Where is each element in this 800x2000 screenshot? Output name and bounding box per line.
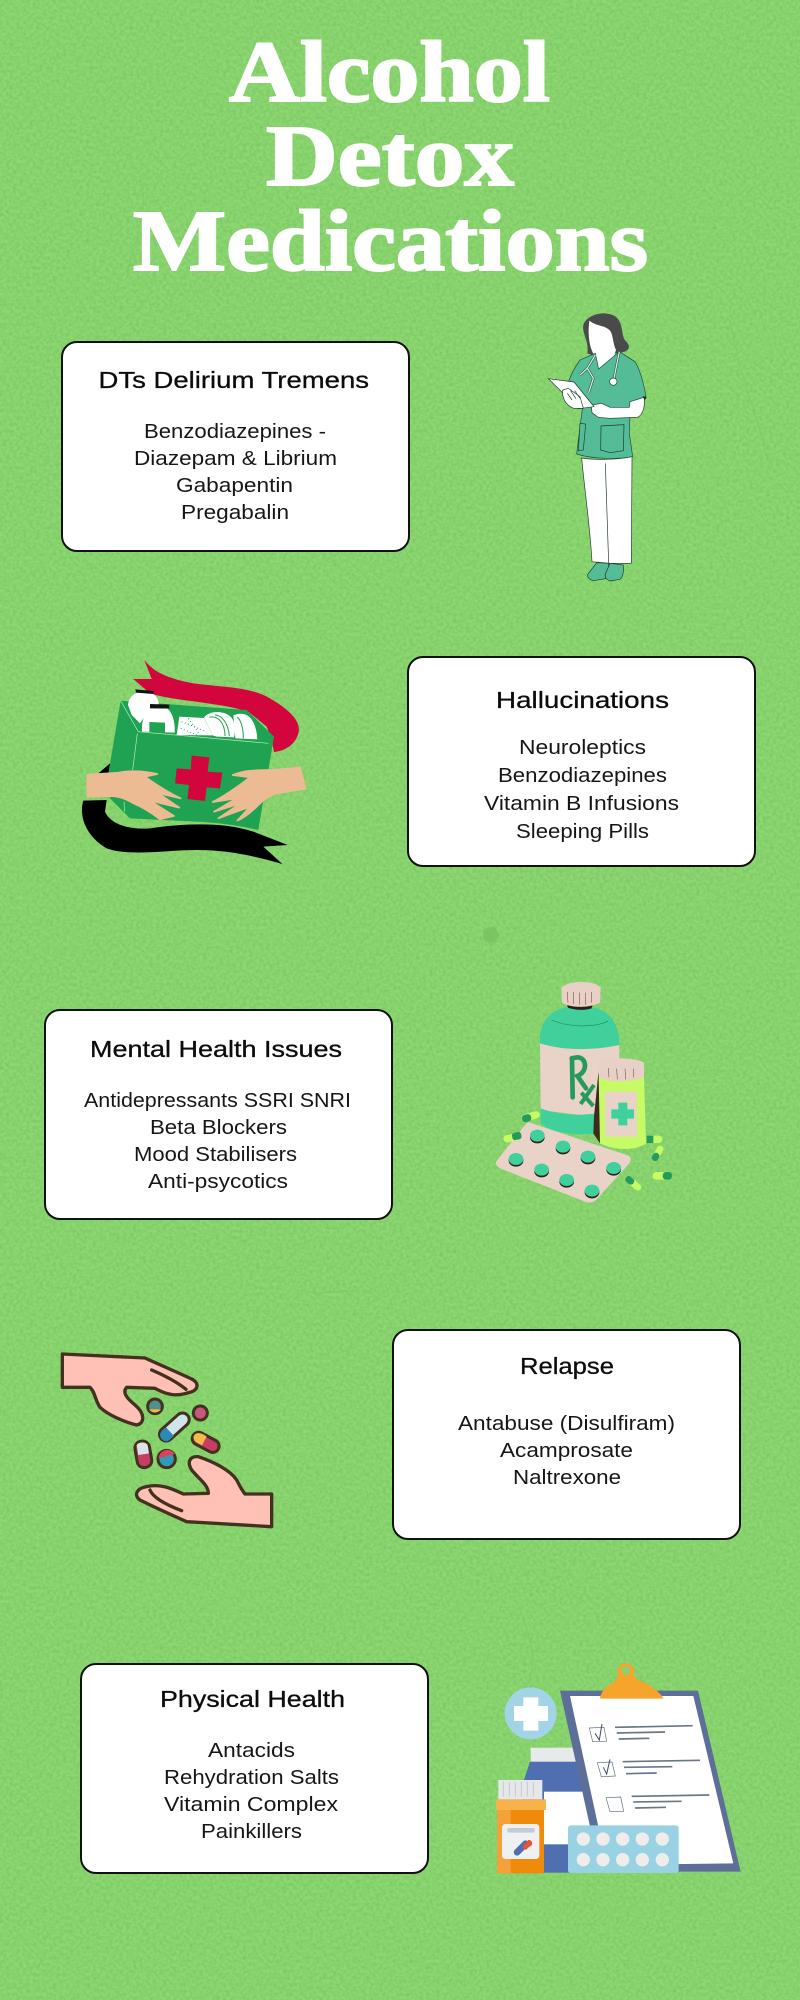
- text block: hallucination medications: Sleeping Pills: [516, 821, 649, 843]
- text block: relapse medications: [458, 1413, 675, 1489]
- title: [133, 23, 648, 289]
- text block: DTs medications: Benzodiazepines -: [144, 421, 326, 443]
- text block: relapse medications: Naltrexone: [513, 1467, 621, 1489]
- text block: mental health medications: Mood Stabilisers: [134, 1144, 297, 1166]
- title: Medications: [133, 192, 648, 289]
- title: Alcohol: [229, 23, 550, 120]
- text block: hallucination medications: Vitamin B Infusions: [484, 793, 679, 815]
- heading: Relapse: Relapse: [520, 1353, 614, 1379]
- heading: Physical Health: Physical Health: [160, 1686, 345, 1712]
- panel: Relapse: [393, 1330, 740, 1539]
- text block: hallucination medications: [484, 737, 679, 843]
- bottles and bandages inside the kit: [128, 689, 257, 739]
- text block: relapse medications: Antabuse (Disulfiram): [458, 1413, 675, 1435]
- icon: nurse with clipboard: [548, 313, 647, 581]
- panel: Mental Health Issues: [45, 1010, 392, 1219]
- text block: mental health medications: Anti-psycotics: [148, 1171, 288, 1193]
- heading: Hallucinations: Hallucinations: [496, 687, 669, 713]
- text block: physical health medications: Antacids: [208, 1740, 295, 1762]
- heading: DTs Delirium Tremens: DTs Delirium Tremens: [98, 367, 369, 393]
- panel: DTs Delirium Tremens: [62, 342, 409, 551]
- text block: mental health medications: Beta Blockers: [150, 1117, 287, 1139]
- icon: first aid kit held by hands: [82, 660, 306, 864]
- icon: prescription bottles and blister pack: [496, 982, 672, 1202]
- icon: hands passing pills: [62, 1354, 272, 1527]
- panel: Physical Health: [81, 1664, 428, 1873]
- title: Detox: [266, 107, 515, 204]
- text block: DTs medications: Diazepam & Librium: [134, 448, 337, 470]
- text block: DTs medications: [134, 421, 337, 524]
- heading: Mental Health Issues: Mental Health Issues: [90, 1036, 342, 1062]
- text block: physical health medications: Painkillers: [201, 1821, 302, 1843]
- text block: DTs medications: Gabapentin: [176, 475, 293, 497]
- icon: clipboard with medicine bottles: [496, 1663, 741, 1873]
- text block: relapse medications: Acamprosate: [500, 1440, 633, 1462]
- text block: physical health medications: Vitamin Complex: [164, 1794, 338, 1816]
- text block: physical health medications: Rehydration Salts: [164, 1767, 339, 1789]
- panel: Hallucinations: [408, 657, 755, 866]
- text block: hallucination medications: Neuroleptics: [519, 737, 646, 759]
- text block: physical health medications: [164, 1740, 339, 1843]
- text block: DTs medications: Pregabalin: [181, 502, 289, 524]
- text block: mental health medications: [84, 1090, 351, 1193]
- text block: mental health medications: Antidepressants SSRI SNRI: [84, 1090, 351, 1112]
- text block: hallucination medications: Benzodiazepines: [498, 765, 667, 787]
